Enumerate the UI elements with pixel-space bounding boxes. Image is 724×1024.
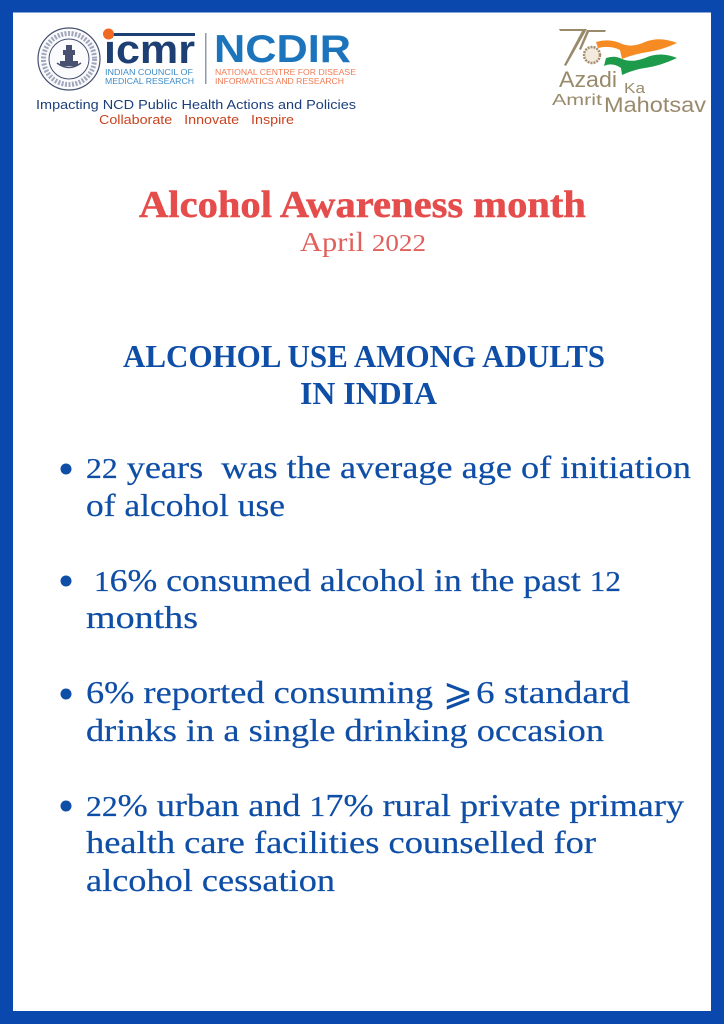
Amrit text: Amrit — [552, 92, 603, 109]
icon: saffron flag band — [596, 39, 677, 59]
ICMR bar — [113, 33, 195, 36]
bullet 3: 6% reported consuming — [86, 674, 433, 710]
motto: Collaborate Innovate Inspire — [99, 113, 294, 127]
NCDIR wordmark: NCDIR — [214, 28, 351, 71]
bullet 3 — [60, 670, 630, 748]
ICMR wordmark: icmr — [104, 28, 195, 72]
NCDIR full name: NATIONAL CENTRE FOR DISEASE — [215, 67, 356, 77]
bullet list — [60, 449, 691, 898]
NCDIR full name: INFORMATICS AND RESEARCH — [215, 76, 344, 86]
bullet 4: health care facilities counselled for — [86, 824, 596, 860]
title: Alcohol Awareness month — [139, 184, 586, 226]
bullet 3: drinks in a single drinking occasion — [86, 712, 604, 748]
bullet 4 — [60, 787, 684, 898]
bullet 2: months — [86, 599, 198, 635]
Ka text: Ka — [624, 80, 646, 97]
bullet 3: ⩾ — [443, 670, 473, 714]
bullet 4: alcohol cessation — [86, 862, 335, 898]
ICMR full name: INDIAN COUNCIL OF — [105, 67, 193, 77]
logo divider — [205, 33, 206, 84]
icon: green flag band — [604, 54, 677, 75]
icon: ICMR orange dot — [103, 28, 114, 40]
bullet 1: of alcohol use — [86, 487, 285, 523]
bullet 3: 6 standard — [476, 674, 630, 710]
bullet 2: 16% consumed alcohol in the past 12 — [94, 562, 621, 598]
Mahotsav text: Mahotsav — [604, 94, 707, 117]
subtitle: date: April 2022 — [300, 227, 426, 257]
Azadi text: Azadi — [559, 67, 617, 92]
bullet 1 — [60, 449, 691, 523]
tagline: Impacting NCD Public Health Actions and Policies — [36, 97, 357, 112]
icon: chakra — [584, 47, 600, 63]
icon: ICMR seal — [38, 28, 100, 90]
header: ICMR NCDIR logo block — [36, 28, 357, 127]
section heading: ALCOHOL USE AMONG ADULTS — [123, 338, 605, 374]
logo: Azadi Ka Amrit Mahotsav — [552, 29, 707, 117]
bullet 2 — [60, 562, 621, 635]
bullet 1: 22 years was the average age of initiation — [86, 449, 691, 485]
icon: 75 numerals — [559, 29, 606, 66]
bullet 4: 22% urban and 17% rural private primary — [86, 787, 684, 823]
section heading: IN INDIA — [300, 375, 437, 411]
ICMR full name: MEDICAL RESEARCH — [105, 76, 194, 86]
